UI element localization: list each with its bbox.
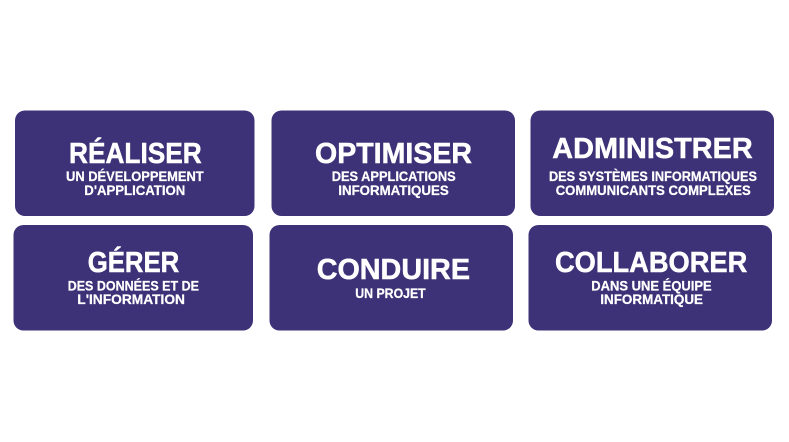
text: des données et de l'information: DES DONNÉES ET DE (68, 279, 199, 294)
text: un projet: UN PROJET (355, 286, 426, 301)
panel: optimiser (272, 110, 515, 216)
text: dans une équipe informatique: INFORMATIQUE (600, 292, 703, 307)
heading: administrer: ADMINISTRER (552, 133, 753, 165)
text: un développement d'application: UN DÉVELOPPEMENT (66, 169, 204, 184)
text: des applications informatiques: INFORMATIQUES (338, 183, 449, 198)
text: des applications informatiques: DES APPLICATIONS (332, 169, 456, 184)
text: des applications informatiques (332, 169, 456, 198)
panel: conduire (270, 225, 513, 330)
panel: réaliser (15, 110, 254, 216)
heading: conduire: CONDUIRE (317, 254, 470, 286)
text: des données et de l'information: L'INFORMATION (77, 292, 185, 307)
heading: réaliser: RÉALISER (69, 136, 202, 170)
text: des systèmes informatiques communicants complexes: COMMUNICANTS COMPLEXES (556, 183, 751, 198)
text: dans une équipe informatique: DANS UNE ÉQUIPE (591, 279, 712, 294)
text: un développement d'application: D'APPLICATION (84, 183, 185, 198)
text: des systèmes informatiques communicants complexes (549, 169, 757, 198)
panel: gérer (14, 225, 253, 330)
text: des systèmes informatiques communicants complexes: DES SYSTÈMES INFORMATIQUES (549, 169, 757, 184)
text: un développement d'application (66, 169, 204, 198)
panel: administrer (530, 110, 774, 216)
heading: optimiser: OPTIMISER (315, 138, 472, 170)
heading: gérer: GÉRER (88, 245, 179, 279)
heading: collaborer: COLLABORER (555, 247, 747, 279)
panel: collaborer (528, 225, 772, 330)
text: dans une équipe informatique (591, 279, 712, 307)
text: des données et de l'information (68, 279, 199, 307)
